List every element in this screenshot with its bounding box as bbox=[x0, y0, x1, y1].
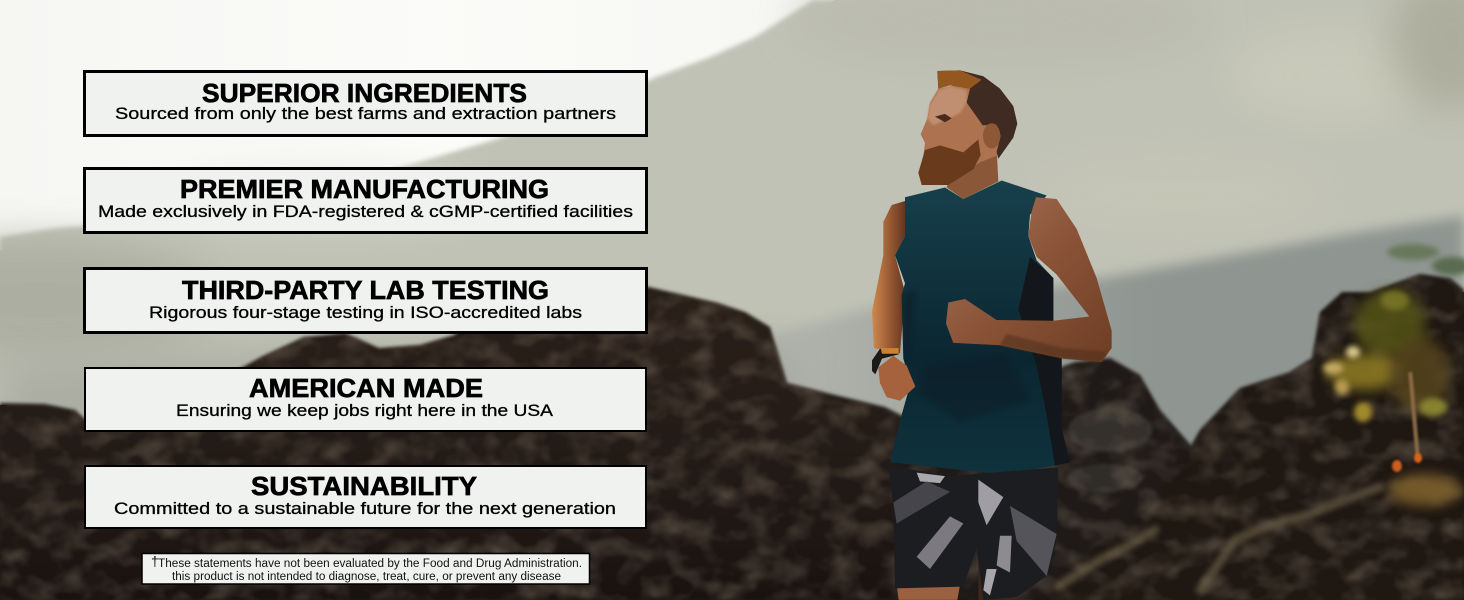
text: description: Rigorous four-stage testing in ISO-accredited labs bbox=[149, 303, 582, 322]
tank shadow folds bbox=[903, 288, 1030, 422]
runner bbox=[872, 70, 1112, 600]
disclaimer note bbox=[142, 553, 590, 584]
arm: near-side left bbox=[872, 201, 906, 353]
panel: premier manufacturing bbox=[84, 168, 646, 232]
hand bbox=[878, 356, 915, 401]
tank dark side panel bbox=[1018, 257, 1070, 466]
forearm shading bbox=[1000, 334, 1107, 362]
panel: american made bbox=[85, 368, 646, 431]
rock silhouette: behind runner bbox=[900, 358, 1210, 600]
neck bbox=[947, 148, 998, 199]
heading: PREMIER MANUFACTURING bbox=[180, 174, 549, 204]
heading: THIRD-PARTY LAB TESTING bbox=[182, 275, 549, 305]
panel: sustainability bbox=[85, 466, 646, 528]
tank top bbox=[890, 180, 1070, 475]
heading: AMERICAN MADE bbox=[249, 373, 483, 403]
rock silhouette: left foreground bbox=[0, 287, 1100, 600]
arm: bent right bbox=[946, 197, 1112, 362]
shorts bbox=[888, 466, 1058, 600]
panel: superior ingredients bbox=[84, 72, 646, 136]
ear bbox=[983, 123, 1000, 149]
rock: right foreground bbox=[1040, 274, 1464, 600]
panel: third-party lab testing bbox=[84, 268, 646, 332]
eye bbox=[935, 114, 952, 122]
text: description: Made exclusively in FDA-registered & cGMP-certified facilities bbox=[98, 202, 633, 221]
rock highlights bbox=[1060, 487, 1380, 590]
text: description: Ensuring we keep jobs right here in the USA bbox=[176, 401, 554, 420]
disclaimer line 2: this product is not intended to diagnose, treat, cure, or prevent any disease bbox=[172, 571, 561, 583]
heading: SUSTAINABILITY bbox=[251, 471, 477, 501]
disclaimer line 1: These statements have not been evaluated by the Food and Drug Administration. bbox=[158, 558, 582, 570]
head bbox=[921, 83, 1003, 183]
heading: SUPERIOR INGREDIENTS bbox=[202, 78, 527, 108]
forehead highlight bbox=[927, 86, 967, 125]
shorts pattern bbox=[893, 473, 1057, 595]
text: description: Committed to a sustainable future for the next generation bbox=[114, 499, 616, 518]
hair bbox=[937, 70, 1017, 159]
dagger mark: † bbox=[151, 553, 159, 569]
text: description: Sourced from only the best farms and extraction partners bbox=[115, 104, 616, 123]
watch bbox=[872, 349, 899, 374]
legs bbox=[897, 552, 1035, 600]
beard bbox=[918, 139, 981, 185]
tree and autumn bush bbox=[1323, 244, 1464, 506]
